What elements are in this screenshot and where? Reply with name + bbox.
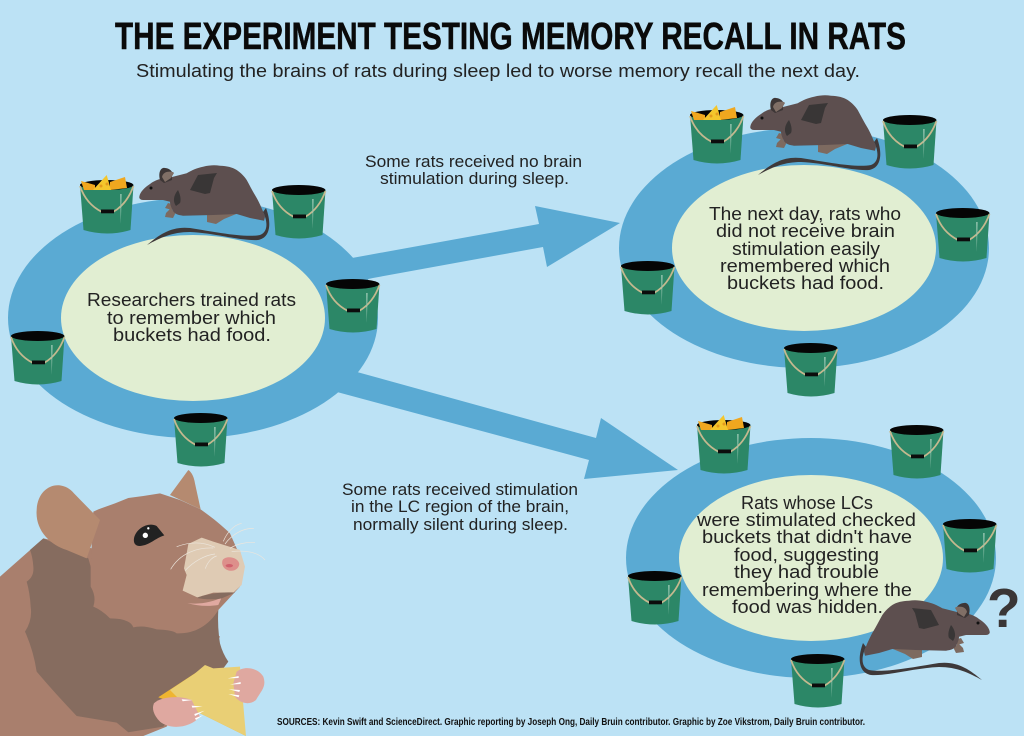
text: no stimulation outcome: did not receive brain (716, 221, 895, 241)
bucket (883, 115, 936, 168)
small ear (170, 470, 201, 509)
rat (139, 165, 269, 245)
text: training (87, 290, 296, 345)
claws (182, 676, 241, 720)
bucket (943, 519, 996, 572)
bucket (784, 343, 838, 396)
bucket (890, 425, 944, 478)
panel: no stimulation outcome ring (619, 95, 990, 397)
left paw (153, 697, 200, 727)
whiskers (171, 523, 265, 571)
text: LC stimulation outcome: Rats whose LCs (741, 493, 873, 513)
panel: LC stimulation outcome ring (626, 415, 996, 708)
panel: training ring (8, 165, 380, 467)
dark fur patch (25, 538, 228, 732)
caption: LC stimulation: normally silent during sleep. (353, 516, 568, 534)
text: LC stimulation outcome: food was hidden. (732, 597, 883, 617)
arrow: to LC stimulation outcome (337, 370, 678, 479)
subtitle: Stimulating the brains of rats during sleep led to worse memory recall the next day. (136, 61, 860, 81)
text: no stimulation outcome: remembered which (720, 256, 890, 276)
large rat eating cheese (0, 470, 265, 736)
bucket (272, 185, 326, 238)
bucket (11, 331, 64, 384)
text: training: Researchers trained rats (87, 290, 296, 310)
text: training: buckets had food. (113, 325, 271, 345)
muzzle (183, 538, 245, 597)
large ear (37, 485, 100, 558)
text: no stimulation outcome: stimulation easily (732, 239, 880, 259)
bucket (628, 571, 682, 624)
nose (222, 557, 239, 571)
mouth (187, 598, 222, 606)
bucket (174, 413, 228, 466)
rat (750, 95, 880, 175)
text: LC stimulation outcome: they had trouble (734, 562, 879, 582)
text: no stimulation outcome (709, 204, 901, 293)
caption: no stimulation: Some rats received no brain (365, 153, 582, 171)
caption: LC stimulation (342, 481, 578, 534)
bucket (326, 279, 380, 332)
head (91, 493, 243, 633)
text: no stimulation outcome: The next day, rats who (709, 204, 901, 224)
caption: no stimulation: stimulation during sleep. (380, 170, 569, 188)
caption: LC stimulation: Some rats received stimulation (342, 481, 578, 499)
text: LC stimulation outcome (696, 493, 916, 617)
text: training: to remember which (107, 308, 276, 328)
right paw (233, 668, 264, 703)
sources: SOURCES: Kevin Swift and ScienceDirect. Graphic reporting by Joseph Ong, Daily Bruin contributor. Graphic by Zoe Vikstrom, Daily Bruin contributor. (277, 716, 865, 728)
cheese (158, 670, 246, 736)
bucket with food (697, 415, 750, 474)
bucket (936, 208, 990, 262)
icon: question mark: ? (987, 577, 1021, 639)
text: LC stimulation outcome: buckets that didn't have (702, 527, 912, 547)
caption: LC stimulation: in the LC region of the brain, (351, 498, 569, 516)
bucket with food (690, 105, 744, 164)
text: no stimulation outcome: buckets had food. (727, 273, 884, 293)
confused rat (860, 600, 990, 680)
text: LC stimulation outcome: were stimulated checked (696, 510, 916, 530)
bucket (621, 261, 674, 314)
caption: no stimulation (365, 153, 582, 188)
text: LC stimulation outcome: remembering where the (702, 580, 912, 600)
body (0, 538, 220, 736)
arrow: to no stimulation outcome (345, 206, 620, 284)
bucket with food (80, 175, 134, 234)
bucket (791, 654, 844, 708)
text: LC stimulation outcome: food, suggesting (734, 545, 879, 565)
eye (134, 525, 164, 546)
